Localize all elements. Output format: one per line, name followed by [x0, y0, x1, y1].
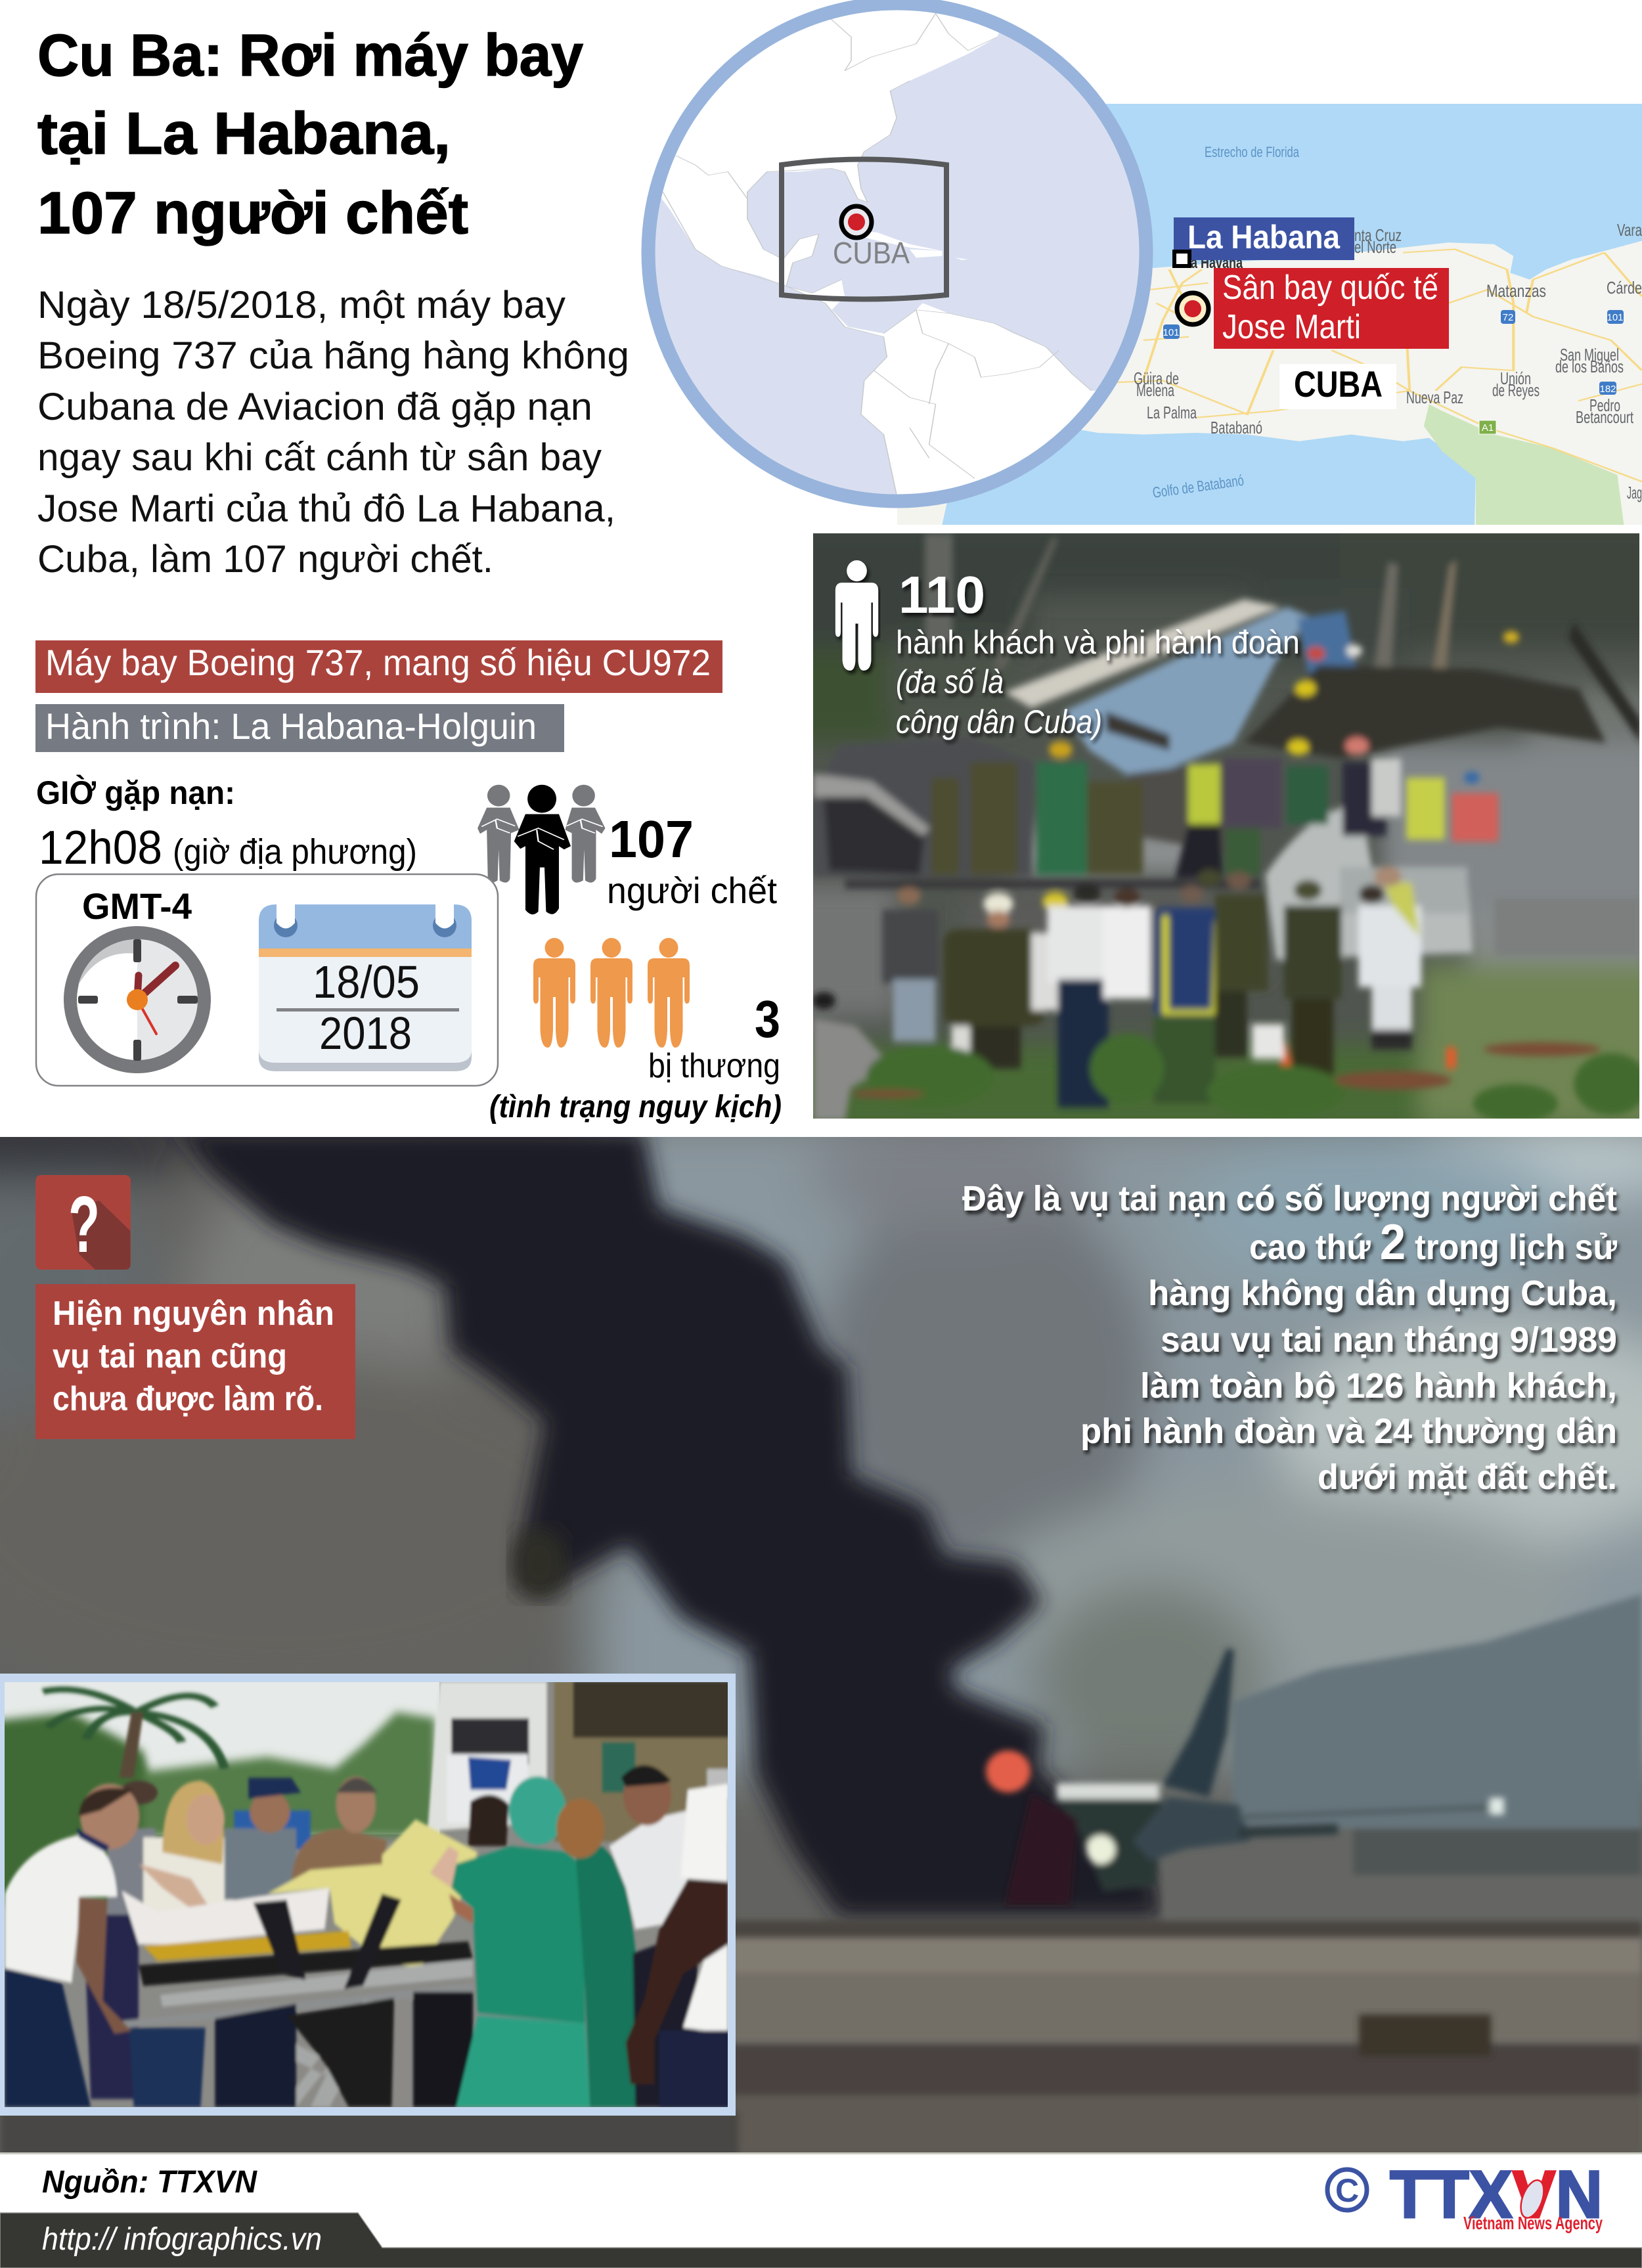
photo: stretcher at ambulance: [0, 1674, 736, 2116]
label: airport: [1214, 268, 1449, 349]
intro paragraph: Ngày 18/5/2018, một máy bay: [37, 284, 566, 326]
clock and date card: [36, 874, 498, 1086]
text: second deadliest accident: sau vụ tai nạn tháng 9/1989: [1161, 1320, 1617, 1360]
stat: 3 injured: 3: [755, 990, 780, 1048]
marker: airport: [1177, 293, 1209, 324]
highway badges: [1163, 310, 1624, 434]
logo: TTXVN: TTXVN: [1390, 2157, 1603, 2232]
map place names: Melena: [1136, 380, 1174, 400]
map place names: Batabanó: [1210, 418, 1262, 437]
text: second deadliest accident: hàng không dân dụng Cuba,: [1148, 1274, 1617, 1313]
accident time: GIỜ gặp nạn:: [36, 774, 235, 811]
title: Cu Ba: Rơi máy bay: [37, 23, 583, 89]
intro paragraph: Cuba, làm 107 người chết.: [37, 538, 493, 581]
passenger text: 110: [899, 566, 985, 624]
photo: crash site: [787, 518, 1642, 1134]
title: [37, 23, 583, 246]
mountain: [1233, 1594, 1642, 1833]
stat: 107 dead: 107: [609, 810, 694, 868]
people at the back: [108, 1829, 155, 1917]
highway badges: 101: [1163, 327, 1180, 338]
stat: 3 injured: (tình trạng nguy kịch): [489, 1090, 782, 1124]
marker: Cuba: [841, 206, 872, 238]
accident time: [36, 774, 417, 874]
passenger text: công dân Cuba): [896, 703, 1102, 740]
callout: cause unknown: vụ tai nạn cũng: [53, 1337, 287, 1375]
title: 107 người chết: [37, 181, 468, 246]
intro paragraph: Cubana de Aviacion đã gặp nạn: [37, 386, 592, 428]
plane tail and fire: [986, 1648, 1504, 2056]
label: CUBA on globe: CUBA: [833, 236, 910, 270]
map panel: [617, 0, 1642, 525]
footer band: [0, 2213, 1642, 2268]
ambulance: [428, 1681, 547, 1831]
icon: calendar: 18/05: [313, 956, 420, 1008]
map place names: Nueva Paz: [1406, 388, 1463, 407]
map place names: Pedro: [1589, 395, 1620, 415]
icon: clock: [64, 926, 211, 1073]
photo: burning plane: [0, 1110, 1642, 2158]
stat: 107 dead: [607, 810, 777, 911]
label: GMT-4: GMT-4: [82, 885, 192, 927]
legs under stretcher: [215, 2004, 296, 2107]
text: second deadliest accident: làm toàn bộ 126 hành khách,: [1140, 1366, 1617, 1406]
text: second deadliest accident: dưới mặt đất chết.: [1318, 1457, 1617, 1497]
stat: 3 injured: [489, 990, 782, 1124]
map place names: de Reyes: [1492, 380, 1540, 400]
passenger text: hành khách và phi hành đoàn: [896, 624, 1300, 661]
label: CUBA: CUBA: [1294, 363, 1383, 405]
icon: calendar: [259, 904, 472, 1071]
highway badges: 72: [1503, 312, 1513, 323]
logo: copyright: [1327, 2169, 1367, 2210]
route bar: Hành trình: La Habana-Holguin: [45, 705, 537, 747]
source: Nguồn: TTXVN: [42, 2165, 257, 2200]
highway badges: 182: [1599, 384, 1616, 395]
intro paragraph: ngay sau khi cất cánh từ sân bay: [37, 436, 602, 479]
map place names: Güira de: [1134, 368, 1179, 388]
map place names: a Havana: [1191, 254, 1243, 272]
locator frame: [782, 159, 946, 300]
patient and stretcher: [267, 1819, 477, 1968]
icon: calendar: 2018: [319, 1008, 412, 1059]
question icon: ?: [68, 1180, 100, 1269]
callout: cause unknown: chưa được làm rõ.: [53, 1380, 323, 1418]
map place names: [1134, 144, 1642, 502]
text: second deadliest accident: [962, 1179, 1618, 1497]
passenger text: (đa số là: [896, 663, 1004, 700]
smoke plume: [151, 1130, 1163, 1917]
flight number bar: Máy bay Boeing 737, mang số hiệu CU972: [45, 642, 711, 683]
nurses: [447, 1846, 585, 2023]
intro paragraph: Boeing 737 của hãng hàng không: [37, 334, 629, 377]
right men: [609, 1810, 690, 1930]
crash site overlay: passengers: [835, 560, 1300, 740]
title: tại La Habana,: [37, 101, 451, 167]
intro paragraph: Jose Marti của thủ đô La Habana,: [37, 487, 615, 530]
accident time: (giờ địa phương): [173, 832, 417, 872]
question icon: [35, 1175, 131, 1270]
stat: 3 injured: bị thương: [648, 1047, 780, 1085]
text: second deadliest accident: Đây là vụ tai nạn có số lượng người chết: [962, 1179, 1617, 1218]
highway badges: 101: [1607, 312, 1624, 323]
map place names: Estrecho de Florida: [1205, 144, 1300, 160]
map place names: Unión: [1500, 368, 1531, 388]
label: La Habana: La Habana: [1187, 219, 1341, 256]
stat: 107 dead: người chết: [607, 870, 777, 911]
text: second deadliest accident: cao thứ 2 trong lịch sử: [1249, 1214, 1618, 1270]
footer: [0, 2152, 1642, 2268]
map place names: nta Cruz: [1354, 225, 1402, 245]
highway badges: A1: [1482, 422, 1494, 434]
icon: deceased people: [477, 785, 606, 914]
passenger text: [896, 566, 1300, 740]
website: http:// infographics.vn: [42, 2222, 322, 2257]
icon: injured people: [533, 938, 690, 1048]
callout: cause unknown: [35, 1284, 355, 1439]
accident time: 12h08: [39, 822, 162, 874]
map place names: Golfo de Batabanó: [1151, 472, 1245, 501]
icon: person: [835, 560, 878, 671]
logo: copyright: C: [1335, 2172, 1359, 2209]
text: second deadliest accident: phi hành đoàn và 24 thường dân: [1080, 1412, 1617, 1451]
map place names: La Palma: [1147, 403, 1197, 422]
callout: cause unknown: Hiện nguyên nhân: [53, 1295, 334, 1333]
map place names: el Norte: [1354, 237, 1396, 257]
road map of Cuba: [897, 104, 1642, 525]
marker: La Habana square: [1174, 252, 1189, 266]
map place names: Matanzas: [1486, 281, 1546, 301]
left man: [5, 1834, 117, 1983]
label: airport: Jose Marti: [1222, 308, 1361, 346]
globe locator: [617, 0, 1149, 525]
label: airport: Sân bay quốc tế: [1222, 269, 1438, 307]
intro paragraph: [37, 284, 629, 581]
